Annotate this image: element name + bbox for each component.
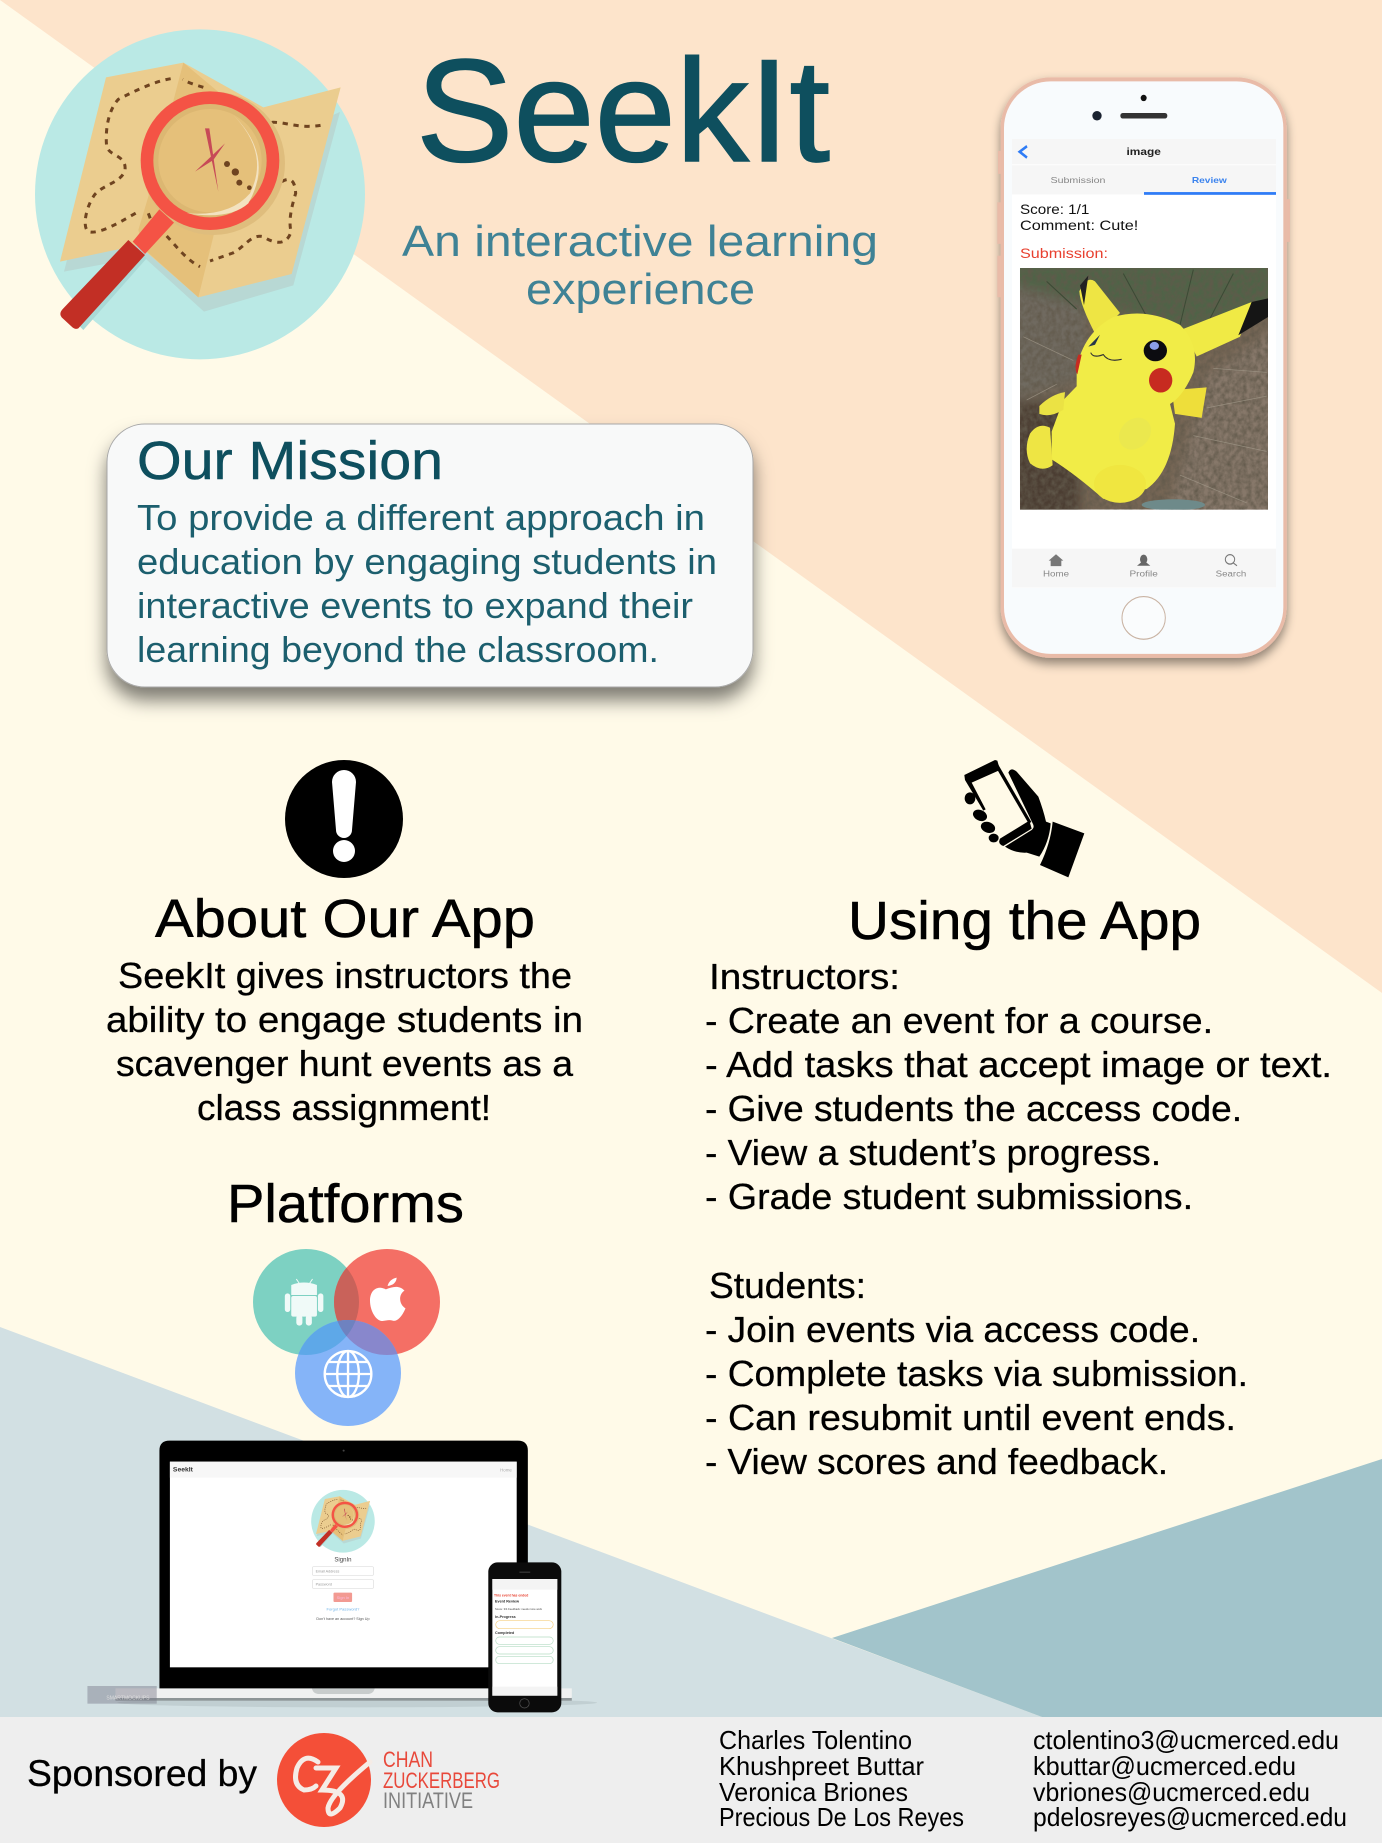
submission label: Submission: (1020, 246, 1108, 261)
sponsored by: Sponsored by (27, 1753, 257, 1794)
laptop and phone mockups: Event Review (495, 1600, 519, 1604)
instructors list: - Grade student submissions. (705, 1176, 1193, 1217)
icon: home (1049, 554, 1063, 566)
tabs: Review (1192, 175, 1228, 185)
team names: Veronica Briones (719, 1777, 908, 1807)
icon: apple (370, 1278, 405, 1321)
icon: hand holding phone (964, 760, 1084, 877)
platforms venn diagram (253, 1249, 440, 1426)
heading: platforms: Platforms (227, 1174, 464, 1234)
students list: Students: (709, 1265, 866, 1306)
instructors list: - View a student’s progress. (705, 1132, 1161, 1173)
icon: globe (325, 1351, 371, 1397)
score text: Score: 1/1 (1020, 202, 1089, 217)
about text (106, 955, 583, 1128)
icon: search (1225, 555, 1237, 566)
nav bar: image (1126, 146, 1161, 157)
mission text: education by engaging students in (137, 541, 717, 582)
CZI wordmark (383, 1747, 500, 1813)
logo on login screen (311, 1490, 375, 1553)
heading: using the app: Using the App (848, 891, 1201, 951)
CZI wordmark: CHAN (383, 1747, 433, 1772)
background: peach triangle (0, 0, 1382, 993)
team names: Precious De Los Reyes (719, 1802, 964, 1832)
tab bar (1012, 549, 1276, 587)
students list: - Can resubmit until event ends. (705, 1397, 1236, 1438)
laptop and phone mockups: Score: 3/4 Feedback: needs more work (495, 1607, 543, 1611)
heading: about our app: About Our App (155, 889, 535, 949)
icon: SeekIt logo, map and magnifier (35, 29, 365, 359)
team emails: vbriones@ucmerced.edu (1033, 1777, 1310, 1807)
laptop and phone mockups: Email Address (316, 1570, 339, 1574)
about text: scavenger hunt events as a (116, 1043, 574, 1084)
laptop and phone mockups: Completed (495, 1631, 515, 1635)
app screen (1012, 139, 1276, 588)
tabs: Submission (1050, 175, 1105, 185)
phone body (1001, 77, 1287, 658)
subtitle: experience (526, 265, 755, 314)
icon: profile (1137, 555, 1150, 566)
instructors list: - Add tasks that accept image or text. (705, 1044, 1332, 1085)
home button (1122, 597, 1165, 639)
team emails: kbuttar@ucmerced.edu (1033, 1751, 1296, 1781)
tab bar: Home (1043, 569, 1069, 579)
mission text: To provide a different approach in (137, 497, 705, 538)
tabs (1012, 165, 1276, 195)
nav bar (1012, 139, 1276, 164)
watermark (87, 1686, 157, 1704)
laptop and phone mockups: Forgot Password? (327, 1606, 360, 1611)
mission text: interactive events to expand their (137, 585, 693, 626)
icon: CZI logo (277, 1733, 371, 1827)
students list (705, 1265, 1248, 1482)
heading: our mission: Our Mission (137, 431, 443, 491)
team names: Charles Tolentino (719, 1725, 912, 1755)
icon: android (285, 1279, 323, 1326)
panel: our mission (107, 424, 753, 687)
CZI wordmark: INITIATIVE (383, 1788, 473, 1813)
mission text: learning beyond the classroom. (137, 629, 659, 670)
instructors list: - Create an event for a course. (705, 1000, 1213, 1041)
mission text (137, 497, 717, 670)
instructors list (705, 956, 1332, 1217)
score text (1020, 202, 1138, 233)
tab bar: Profile (1129, 569, 1158, 579)
tab bar: Search (1216, 569, 1246, 579)
team names (719, 1725, 964, 1832)
instructors list: Instructors: (709, 956, 900, 997)
background: teal wedge (832, 1459, 1382, 1717)
photo: plush Pikachu (1020, 268, 1268, 510)
students list: - Complete tasks via submission. (705, 1353, 1248, 1394)
students list: - View scores and feedback. (705, 1441, 1168, 1482)
score text: Comment: Cute! (1020, 218, 1138, 233)
laptop body (159, 1441, 528, 1688)
laptop and phone mockups: Home (500, 1468, 512, 1473)
small phone (488, 1562, 561, 1712)
background: light blue band (0, 1327, 1042, 1717)
students list: - Join events via access code. (705, 1309, 1200, 1350)
footer panel (0, 1717, 1382, 1843)
laptop base shadow (117, 1698, 597, 1707)
subtitle: An interactive learning (402, 217, 878, 266)
laptop and phone mockups: In-Progress (495, 1615, 516, 1619)
CZI wordmark: ZUCKERBERG (383, 1768, 500, 1793)
laptop screen (170, 1462, 517, 1667)
laptop and phone mockups: SMARTMOCKUPS (106, 1695, 150, 1701)
about text: ability to engage students in (106, 999, 583, 1040)
team emails: ctolentino3@ucmerced.edu (1033, 1725, 1339, 1755)
subtitle (402, 217, 878, 314)
laptop and phone mockups: Sign In (337, 1595, 349, 1600)
title: SeekIt (416, 29, 830, 192)
laptop and phone mockups: SeekIt (173, 1467, 194, 1474)
team names: Khushpreet Buttar (719, 1751, 924, 1781)
laptop base (115, 1688, 572, 1700)
team emails (1033, 1725, 1347, 1832)
phone mockup: review screen (997, 77, 1290, 658)
laptop and phone mockups (87, 1441, 597, 1712)
laptop and phone mockups: SignIn (334, 1558, 352, 1564)
team emails: pdelosreyes@ucmerced.edu (1033, 1802, 1347, 1832)
icon: exclamation mark (285, 760, 403, 878)
about text: class assignment! (197, 1087, 491, 1128)
laptop and phone mockups: Don't have an account? Sign Up (316, 1617, 370, 1621)
laptop and phone mockups: Password (316, 1583, 332, 1587)
instructors list: - Give students the access code. (705, 1088, 1242, 1129)
about text: SeekIt gives instructors the (118, 955, 572, 996)
laptop and phone mockups: This event has ended (494, 1594, 528, 1598)
